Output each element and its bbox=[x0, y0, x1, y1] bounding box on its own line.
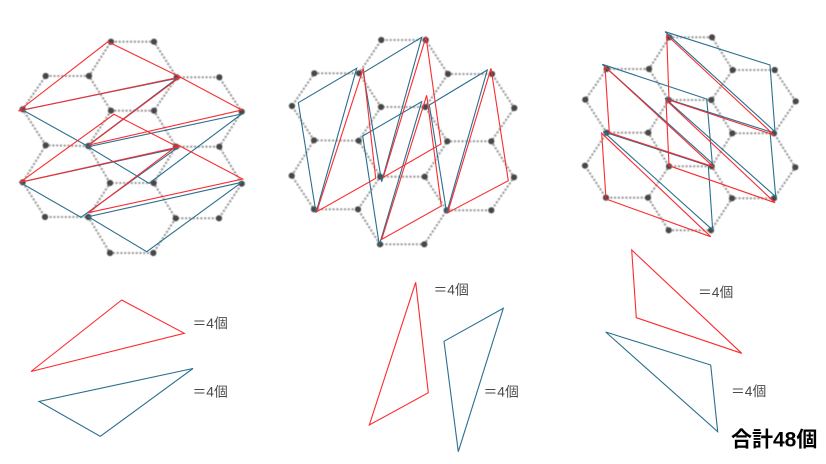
legend triangle: left blue bbox=[39, 368, 193, 436]
panel: left hexagon diagram bbox=[18, 39, 245, 256]
blue triangles bbox=[298, 37, 487, 245]
legend triangle: right red bbox=[632, 250, 742, 353]
legend label: centre red count: ＝4個 bbox=[434, 282, 469, 298]
legend triangle: right blue bbox=[606, 332, 718, 432]
legend triangle: centre red bbox=[369, 282, 428, 425]
legend triangle: centre blue bbox=[444, 308, 503, 452]
hexagon dotted grid bbox=[20, 39, 245, 256]
total count label: 合計48個 bbox=[731, 428, 817, 452]
legend label: right blue count: ＝4個 bbox=[731, 384, 766, 399]
hexagon dotted grid bbox=[289, 37, 517, 247]
legend label: centre blue count: ＝4個 bbox=[484, 384, 519, 400]
panel: centre hexagon diagram bbox=[289, 37, 517, 247]
red triangles bbox=[602, 35, 775, 237]
hexagon dotted grid bbox=[582, 34, 799, 233]
blue triangles bbox=[20, 78, 242, 252]
legend triangle: left red bbox=[31, 300, 184, 372]
legend label: left red count: ＝4個 bbox=[192, 316, 228, 331]
panel: right hexagon diagram bbox=[582, 32, 799, 237]
red triangles bbox=[317, 37, 508, 239]
legend label: right red count: ＝4個 bbox=[698, 285, 733, 300]
red triangles bbox=[18, 42, 243, 213]
legend label: left blue count: ＝4個 bbox=[192, 384, 228, 400]
blue triangles bbox=[602, 32, 776, 230]
